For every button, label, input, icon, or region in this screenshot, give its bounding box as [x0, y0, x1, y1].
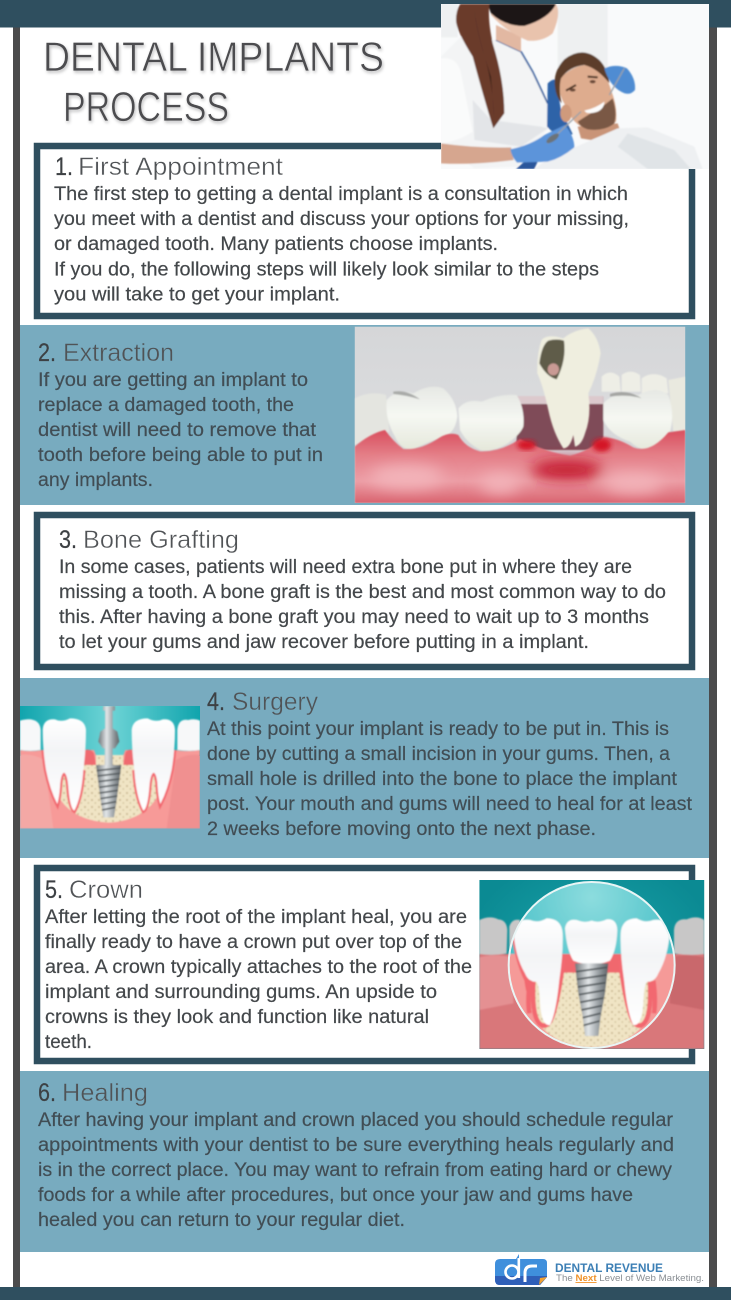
heading: step 3: Bone Grafting [83, 526, 239, 554]
text block: step 4: done by cutting a small incision in your gums. Then, a [207, 744, 670, 765]
illustration: finished crown in magnified circle [479, 880, 704, 1051]
text block: step 6 [38, 1110, 674, 1231]
text block: step 2: tooth before being able to put in [38, 445, 323, 466]
text block: step 2: any implants. [38, 470, 153, 491]
text block: step 4: post. Your mouth and gums will need to heal for at least [207, 794, 693, 815]
text block: step 5: area. A crown typically attaches to the root of the [45, 957, 472, 978]
text block: step 6: After having your implant and crown placed you should schedule regular [38, 1110, 674, 1131]
text block: step 5: implant and surrounding gums. An upside to [45, 982, 437, 1003]
text block: step 3: to let your gums and jaw recover before putting in a implant. [59, 632, 589, 653]
text block: step 3: this. After having a bone graft you may need to wait up to 3 months [59, 607, 649, 628]
text block: step 5: teeth. [45, 1032, 92, 1053]
text block: step 5: finally ready to have a crown put over top of the [45, 932, 462, 953]
text block: step 4: small hole is drilled into the bone to place the implant [207, 769, 678, 790]
logo: Dental Revenue [495, 1254, 704, 1285]
panel: step 3 bone grafting [37, 515, 692, 667]
panel: step 6 healing [20, 1071, 709, 1252]
text block: step 3: missing a tooth. A bone graft is the best and most common way to do [59, 582, 666, 603]
panel: step 4 surgery [20, 678, 709, 858]
text block: step 2: dentist will need to remove that [38, 420, 317, 441]
text block: step 1 [54, 184, 629, 306]
text block: step 5: crowns is they look and function like natural [45, 1007, 429, 1028]
text block: step 1: or damaged tooth. Many patients choose implants. [54, 234, 498, 255]
heading: step 4: 4. [207, 688, 225, 716]
heading: step 1: First Appointment [78, 153, 283, 181]
panel: step 2 extraction [20, 325, 709, 505]
heading: step 2: Extraction [63, 339, 174, 367]
title: PROCESS [63, 83, 229, 130]
text block: step 6: healed you can return to your regular diet. [38, 1210, 405, 1231]
text block: step 3: In some cases, patients will need extra bone put in where they are [59, 557, 632, 578]
heading: step 1: 1. [55, 153, 73, 181]
title [43, 33, 384, 130]
text block: step 5: After letting the root of the implant heal, you are [45, 907, 467, 928]
illustration: implant post in jaw [20, 706, 200, 829]
text block: step 4: 2 weeks before moving onto the next phase. [207, 819, 596, 840]
left side border [13, 27, 20, 1288]
text block: step 2: If you are getting an implant to [38, 370, 308, 391]
text block: step 6: is in the correct place. You may want to refrain from eating hard or chewy [38, 1160, 673, 1181]
text block: step 2: replace a damaged tooth, the [38, 395, 294, 416]
text block: step 2 [38, 370, 323, 491]
text block: step 1: you will take to get your implant. [54, 284, 340, 306]
text block: step 6: appointments with your dentist to be sure everything heals regularly and [38, 1135, 674, 1156]
brand name: DENTAL REVENUE [555, 1263, 663, 1275]
text block: step 5 [45, 907, 472, 1053]
heading: step 5: 5. [45, 876, 63, 904]
heading: step 2: 2. [38, 339, 56, 367]
heading: step 6: Healing [62, 1079, 148, 1107]
title: DENTAL IMPLANTS [43, 33, 384, 80]
heading: step 3: 3. [59, 526, 77, 554]
icon: dr badge [495, 1254, 547, 1285]
heading: step 4: Surgery [232, 688, 318, 716]
panel: step 5 crown [37, 868, 704, 1061]
photo: tooth extraction [355, 327, 685, 503]
text block: step 1: If you do, the following steps will likely look similar to the steps [54, 260, 599, 280]
text block: step 6: foods for a while after procedures, but once your jaw and gums have [38, 1185, 633, 1206]
panel: step 1 first appointment [37, 146, 692, 316]
right side border [709, 27, 717, 1288]
text block: step 4: At this point your implant is ready to be put in. This is [207, 719, 669, 740]
text block: step 3 [59, 557, 666, 653]
text block: step 4 [207, 719, 693, 840]
photo: dentist treating patient [441, 4, 709, 169]
top header bar [0, 0, 731, 28]
tagline: The Next Level of Web Marketing. [556, 1273, 704, 1283]
bottom footer bar [0, 1287, 731, 1300]
text block: step 1: you meet with a dentist and discuss your options for your missing, [54, 209, 629, 230]
magnifying circle contents [507, 880, 677, 1051]
text block: step 1: The first step to getting a dental implant is a consultation in which [54, 184, 628, 205]
heading: step 6: 6. [38, 1079, 56, 1107]
heading: step 5: Crown [69, 876, 143, 904]
